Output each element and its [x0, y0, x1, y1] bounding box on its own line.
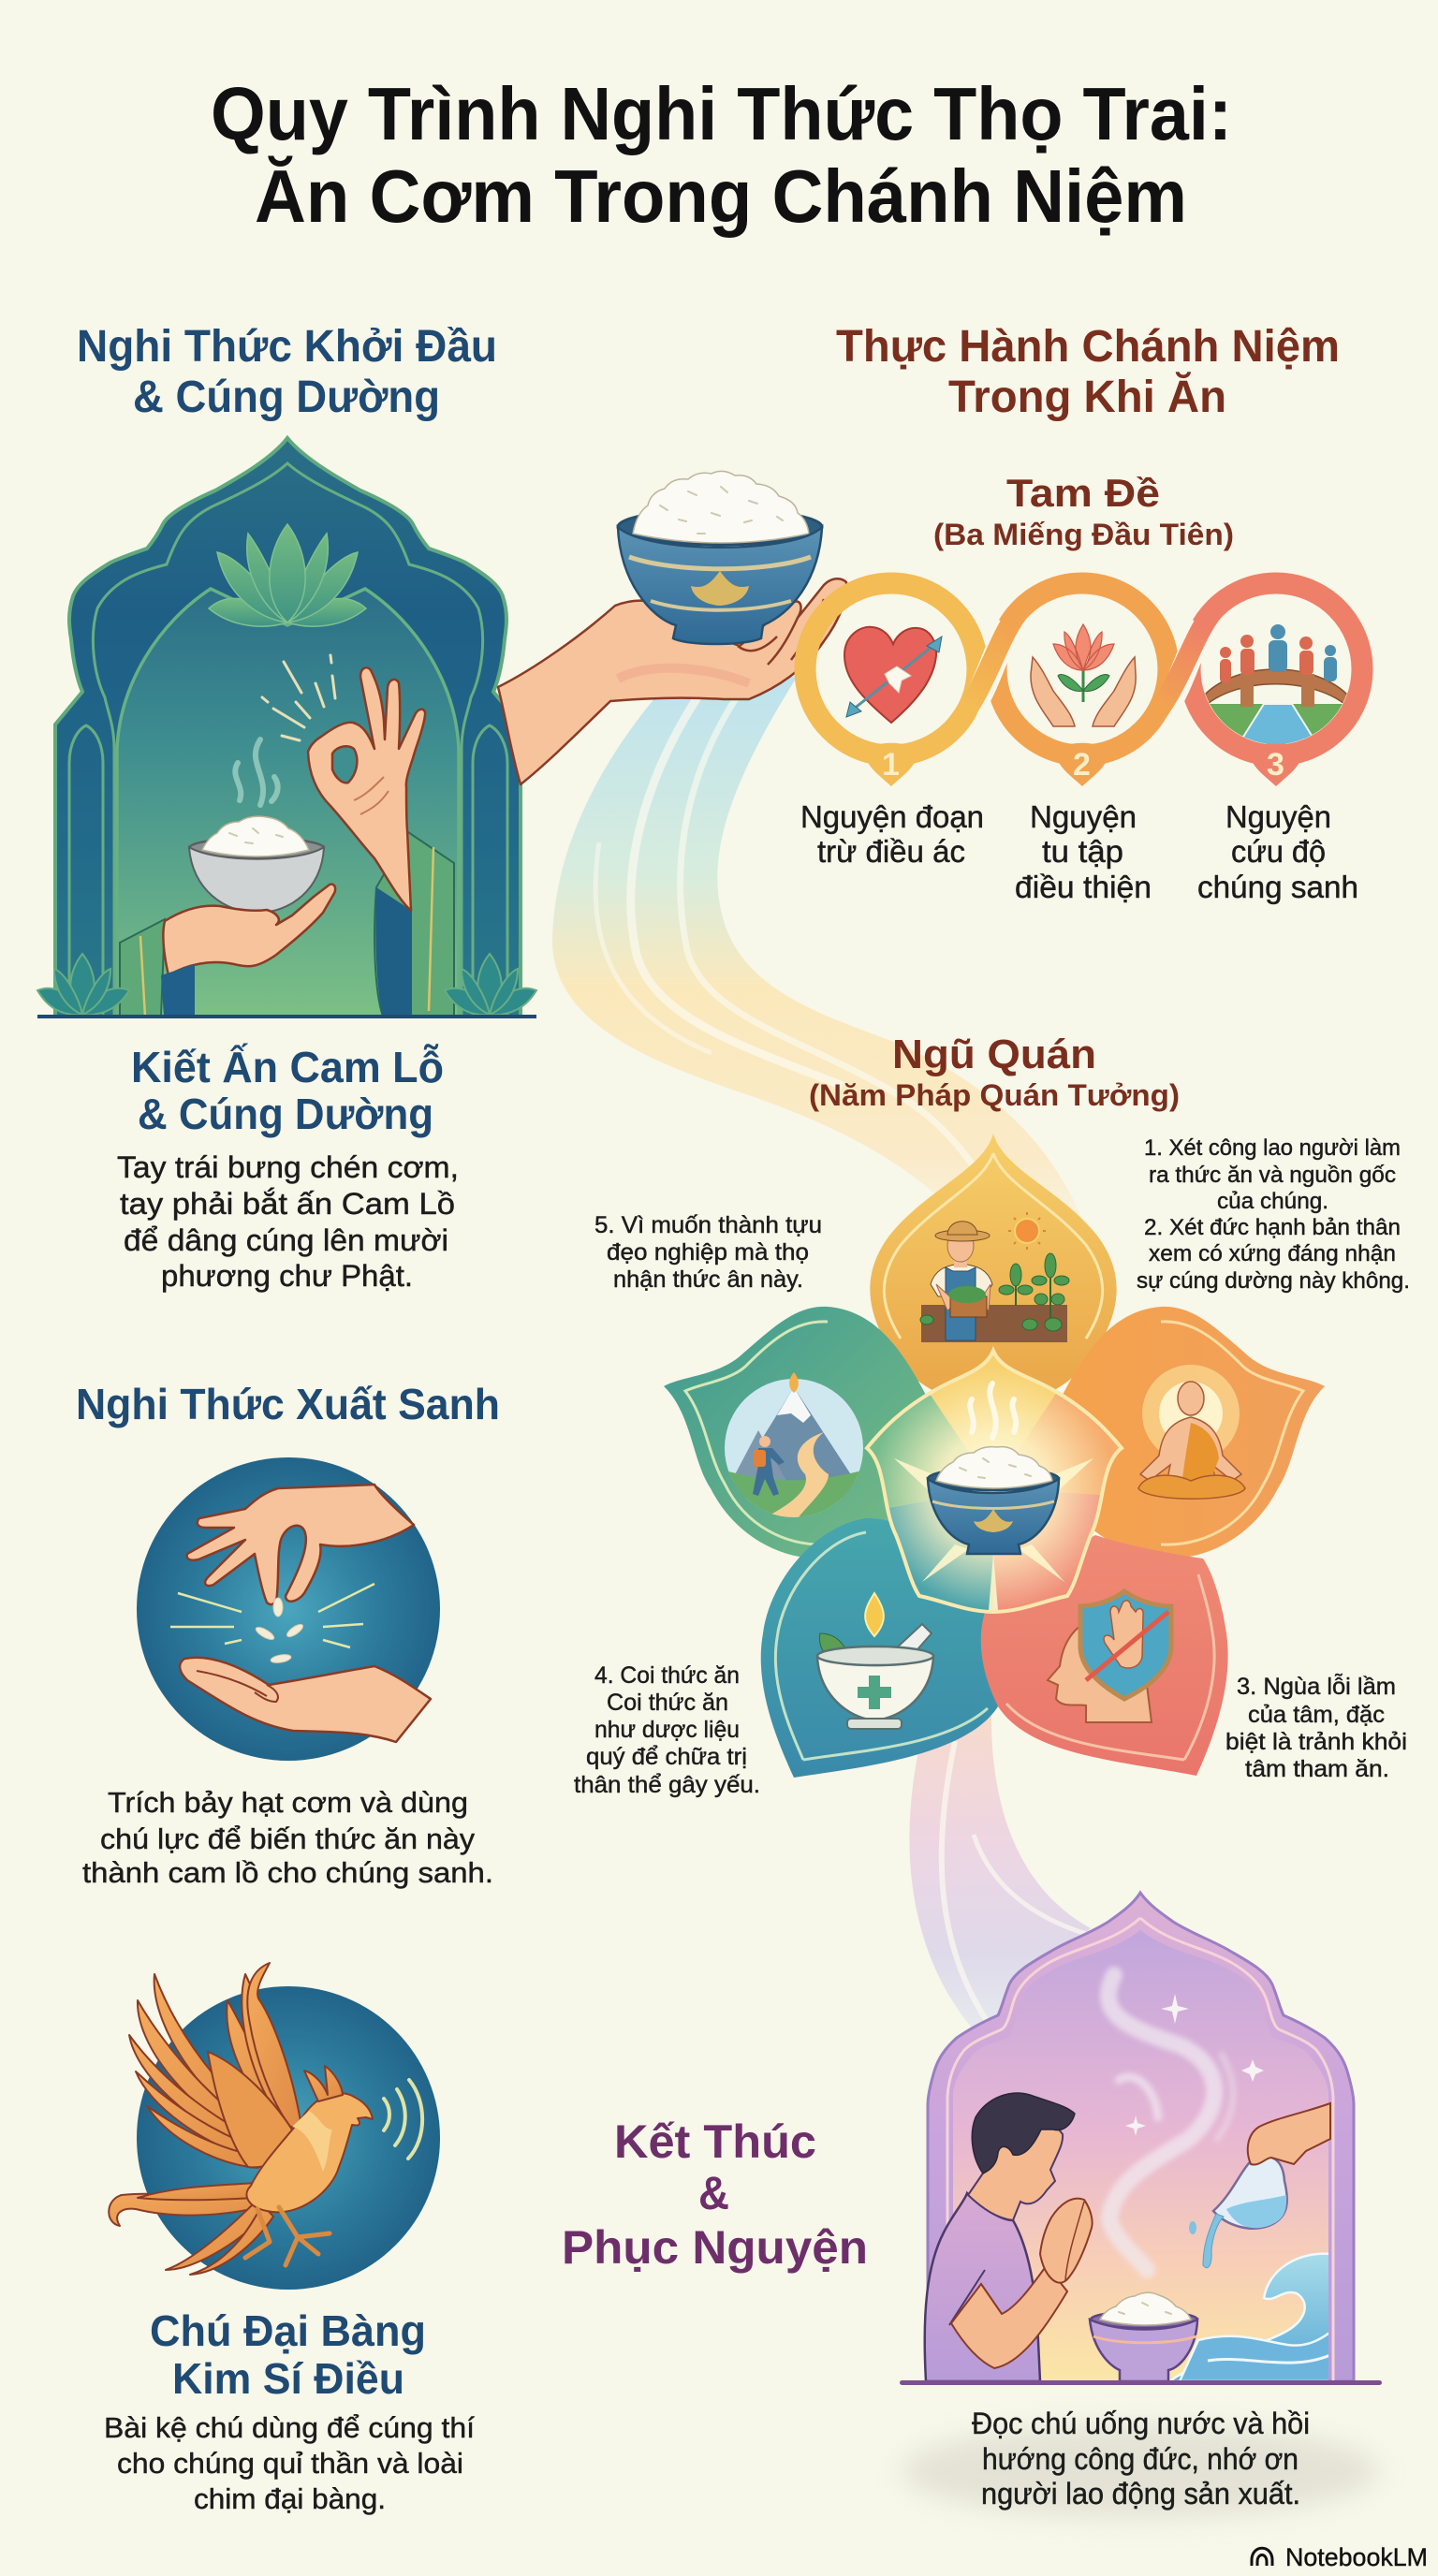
heading: mindful eating: Thực Hành Chánh Niệm [836, 322, 1340, 372]
icon: hands dropping rice circle [137, 1457, 440, 1761]
claws [245, 2207, 330, 2265]
icon: meditating monk [1138, 1365, 1245, 1499]
title [211, 72, 1232, 238]
text: Dai Bang description: chim đại bàng. [194, 2482, 386, 2515]
sound arcs [384, 2080, 422, 2159]
text: closing description: người lao động sản xuất. [981, 2477, 1300, 2510]
text: contemplations 1 and 2: ra thức ăn và nguồn gốc [1149, 1163, 1396, 1188]
icon: hand pouring water [1189, 2103, 1330, 2268]
text: Kiet An description: tay phải bắt ấn Cam Lồ [120, 1187, 455, 1221]
icon: hands with lotus [1031, 624, 1136, 726]
petal: orange monk [1058, 1307, 1325, 1559]
heading: Kiet An Cam Lo: & Cúng Dường [138, 1090, 433, 1138]
heading: Ngu Quan: Ngũ Quán [892, 1032, 1096, 1077]
petal: coral restraint [981, 1535, 1228, 1776]
icon: mortar and flame [817, 1593, 933, 1729]
text: Kiet An description: để dâng cúng lên mười [124, 1223, 448, 1257]
vow labels: Nguyện [1030, 799, 1137, 834]
heading: ending and vows: & [698, 2167, 729, 2219]
text: contemplations 1 and 2: của chúng. [1217, 1189, 1328, 1214]
text: contemplation 4: thân thể gây yếu. [574, 1772, 760, 1798]
text: closing description: hướng công đức, nhớ ơn [982, 2442, 1299, 2476]
icon: lotus crown [209, 524, 366, 626]
heading: opening ritual: & Cúng Dường [133, 373, 440, 422]
side pillars [69, 725, 507, 1017]
text: contemplation 5 [594, 1212, 822, 1293]
icon: center bowl [928, 1447, 1059, 1554]
crest [304, 2066, 343, 2101]
petal: blue medicine [761, 1518, 998, 1778]
text: contemplation 3: của tâm, đặc [1248, 1702, 1385, 1728]
heading: Chu Dai Bang: Chú Đại Bàng [150, 2306, 426, 2355]
center medallion: rice bowl [864, 1346, 1124, 1614]
text: contemplation 4 [574, 1662, 760, 1798]
text: contemplation 4: 4. Coi thức ăn [594, 1662, 740, 1689]
panel: five contemplations flower [664, 1134, 1325, 1778]
text: contemplations 1 and 2 [1137, 1135, 1410, 1294]
sparkles [1125, 1994, 1264, 2136]
heading: Nghi Thuc Xuat Sanh: Nghi Thức Xuất Sanh [76, 1380, 500, 1428]
brand mark: NotebookLM: NotebookLM [1285, 2543, 1428, 2571]
text: closing description: Đọc chú uống nước và hồi [972, 2407, 1310, 2440]
text: contemplation 3: 3. Ngùa lỗi lầm [1237, 1673, 1396, 1700]
tail feathers [109, 2183, 273, 2275]
icon: right hand mudra [308, 667, 454, 1017]
panel: green arch offering scene [37, 438, 536, 1018]
number tabs: 2 [1073, 747, 1091, 783]
lower hand [180, 1658, 431, 1742]
rice sparks [262, 655, 335, 740]
text: contemplations 1 and 2: 1. Xét công lao người làm [1144, 1135, 1401, 1161]
body and head [246, 2093, 373, 2212]
icon: blue rice bowl [618, 471, 822, 644]
vow labels: chúng sanh [1197, 870, 1358, 904]
vow labels: điều thiện [1015, 870, 1152, 904]
heading: Tam De: (Ba Miếng Đầu Tiên) [933, 518, 1234, 551]
flow stream: lower [909, 1685, 1091, 2041]
incense swirl [1108, 1975, 1233, 2270]
flow stream: upper [552, 676, 1081, 1245]
text: contemplation 4: Coi thức ăn [607, 1690, 728, 1716]
panel: three vows rings [800, 583, 1362, 904]
text: Dai Bang description: cho chúng quỉ thần và loài [117, 2447, 463, 2480]
icon: small rice bowl [189, 816, 324, 913]
wave [1169, 2254, 1332, 2381]
heading: ending and vows: Phục Nguyện [562, 2221, 868, 2274]
text: contemplation 3: tâm tham ăn. [1245, 1756, 1389, 1782]
text: Xuat Sanh description: thành cam lồ cho chúng sanh. [82, 1856, 493, 1889]
panel: purple arch closing scene [900, 1893, 1382, 2385]
text: contemplation 5: 5. Vì muốn thành tựu [594, 1212, 822, 1238]
title: Quy Trình Nghi Thức Thọ Trai: [211, 72, 1232, 155]
text: contemplation 5: nhận thức ân này. [613, 1266, 803, 1293]
text: Kiet An description: phương chư Phật. [161, 1259, 413, 1293]
heading: opening ritual: Nghi Thức Khởi Đầu [77, 322, 497, 372]
text: contemplations 1 and 2: sự cúng dường này không. [1137, 1268, 1410, 1294]
icon: steam [235, 739, 278, 805]
icon: golden garuda circle [109, 1963, 440, 2290]
icon: large hand holding bowl [498, 471, 846, 784]
heading: ending and vows [562, 2115, 868, 2274]
rice grains [254, 1598, 304, 1664]
upper hand [187, 1485, 414, 1604]
text: contemplation 4: quý để chữa trị [586, 1744, 747, 1770]
near wing feathers [129, 1974, 298, 2168]
icon: left hand holding bowl [120, 885, 335, 1017]
text: contemplations 1 and 2: 2. Xét đức hạnh bản thân [1144, 1215, 1401, 1240]
text: Xuat Sanh description: Trích bảy hạt cơm và dùng [108, 1786, 468, 1819]
number tabs: 1 [882, 747, 900, 783]
heading: Tam De: Tam Đề [1006, 471, 1160, 515]
text: contemplations 1 and 2: xem có xứng đáng nhận [1149, 1241, 1396, 1266]
text: Xuat Sanh description [82, 1786, 493, 1889]
base line [900, 2380, 1382, 2385]
text: contemplation 3 [1225, 1673, 1407, 1782]
petal: yellow farmer [870, 1134, 1117, 1404]
sun rays [894, 1458, 1093, 1610]
heading: Chu Dai Bang: Kim Sí Điều [172, 2354, 404, 2403]
heading: mindful eating [836, 322, 1340, 422]
interlaced crossings [952, 608, 1215, 730]
number tabs: 3 [1267, 747, 1284, 783]
icon: heart with arrow [844, 627, 942, 723]
text: contemplation 3: biệt là trảnh khỏi [1225, 1729, 1407, 1755]
text: Kiet An description: Tay trái bưng chén cơm, [117, 1150, 459, 1184]
heading: Ngu Quan [809, 1032, 1180, 1112]
inner arch glow [117, 589, 459, 1017]
heading: Kiet An Cam Lo: Kiết Ấn Cam Lỗ [131, 1043, 444, 1091]
icon: head with shield [1048, 1591, 1171, 1722]
heading: Kiet An Cam Lo [131, 1043, 444, 1138]
vow labels: Nguyện đoạn [800, 799, 984, 834]
number tabs [866, 743, 1301, 786]
icon: farmer [920, 1212, 1069, 1342]
heading: Chu Dai Bang [150, 2306, 426, 2403]
far wing feathers [227, 1963, 301, 2127]
icon: bridge and people [1205, 624, 1347, 744]
vow labels: cứu độ [1231, 834, 1326, 869]
text: Kiet An description [117, 1150, 459, 1293]
vow labels [800, 799, 1358, 904]
steam [970, 1383, 1016, 1438]
heading: Ngu Quan: (Năm Pháp Quán Tưởng) [809, 1078, 1180, 1112]
text: contemplation 4: như dược liệu [594, 1717, 740, 1743]
heading: ending and vows: Kết Thúc [614, 2115, 816, 2168]
text: Xuat Sanh description: chú lực để biến thức ăn này [100, 1822, 476, 1855]
icon: purple rice bowl [1090, 2292, 1197, 2381]
heading: Tam De [933, 471, 1234, 551]
vow labels: trừ điều ác [817, 834, 965, 869]
heading: mindful eating: Trong Khi Ăn [948, 372, 1226, 422]
text: closing description [902, 2407, 1379, 2518]
heading: opening ritual [77, 322, 497, 422]
text: Dai Bang description [104, 2411, 475, 2515]
scene background [946, 1919, 1339, 2382]
icon: praying man [925, 2093, 1093, 2381]
title: Ăn Cơm Trong Chánh Niệm [255, 154, 1187, 238]
vow labels: tu tập [1042, 834, 1123, 869]
text: contemplation 5: đẹo nghiệp mà thọ [607, 1239, 809, 1266]
vow labels: Nguyện [1225, 799, 1331, 834]
text: Dai Bang description: Bài kệ chú dùng để cúng thí [104, 2411, 475, 2444]
petal: green mountain [664, 1307, 931, 1559]
icon: small lotuses at base [37, 954, 536, 1015]
icon: mountain path with hiker [721, 1372, 866, 1521]
